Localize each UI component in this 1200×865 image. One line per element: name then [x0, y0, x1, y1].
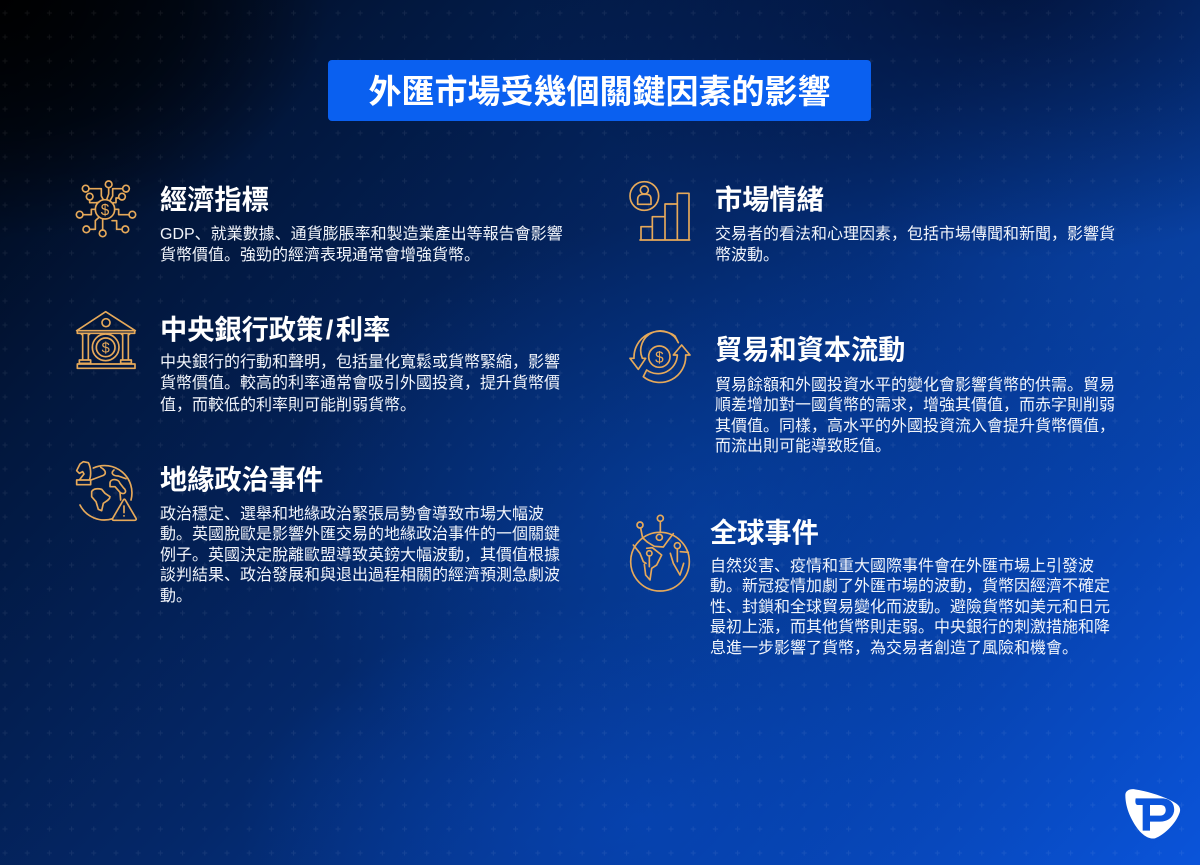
text: geopolitical events: 例子。英國決定脫離歐盟導致英鎊大幅波動，其價值根據 — [160, 547, 560, 564]
text: trade and capital flows: 而流出則可能導致貶值。 — [715, 438, 891, 455]
heading: trade and capital flows: 貿易和資本流動 — [715, 334, 905, 365]
icon: central bank: $ — [102, 341, 110, 357]
text: market sentiment — [715, 225, 1115, 264]
text: trade and capital flows: 順差增加對一國貨幣的需求，增強其價值，而赤字則削弱 — [715, 397, 1115, 414]
heading: economic indicators: 經濟指標 — [160, 184, 269, 215]
text: geopolitical events: 談判結果、政治發展和與退出過程相關的經濟預測急劇波 — [160, 567, 560, 584]
text: global events: 息進一步影響了貨幣，為交易者創造了風險和機會。 — [710, 640, 1078, 657]
text: economic indicators: 貨幣價值。強勁的經濟表現通常會增強貨幣。 — [160, 247, 480, 264]
text: geopolitical events — [160, 505, 560, 605]
text: market sentiment: 幣波動。 — [715, 247, 779, 264]
text: global events: 最初上漲，而其他貨幣則走弱。中央銀行的刺激措施和降 — [710, 619, 1110, 636]
icon: economic indicators network: $ — [101, 202, 110, 219]
text: trade and capital flows: 其價值。同樣，高水平的外國投資流入會提升貨幣價值， — [715, 418, 1115, 435]
title — [328, 60, 871, 121]
heading: central bank policy: 中央銀行政策/利率 — [160, 314, 390, 345]
text: central bank policy: 中央銀行的行動和聲明，包括量化寬鬆或貨幣緊縮，影響 — [160, 354, 560, 371]
text: global events: 自然災害、疫情和重大國際事件會在外匯市場上引發波 — [710, 558, 1094, 575]
text: global events: 性、封鎖和全球貿易變化而波動。避險貨幣如美元和日元 — [710, 599, 1110, 616]
text: geopolitical events: 政治穩定、選舉和地緣政治緊張局勢會導致市場大幅波 — [160, 506, 544, 523]
text: geopolitical events: 動。 — [160, 588, 192, 605]
text: trade and capital flows: 貿易餘額和外國投資水平的變化會影響貨幣的供需。貿易 — [715, 377, 1115, 394]
text: geopolitical events: 動。英國脫歐是影響外匯交易的地緣政治事件的一個關鍵 — [160, 526, 560, 543]
text: economic indicators: GDP、就業數據、通貨膨脹率和製造業產出等報告會影響 — [160, 226, 563, 243]
heading: geopolitical events: 地緣政治事件 — [160, 464, 323, 495]
title: 外匯市場受幾個關鍵因素的影響 — [368, 73, 830, 110]
text: central bank policy: 值，而較低的利率則可能削弱貨幣。 — [160, 397, 416, 414]
icon: trade and capital flow cycle: $ — [655, 349, 664, 366]
text: central bank policy: 貨幣價值。較高的利率通常會吸引外國投資，提升貨幣價 — [160, 375, 560, 392]
text: global events: 動。新冠疫情加劇了外匯市場的波動，貨幣因經濟不確定 — [710, 578, 1110, 595]
text: trade and capital flows — [715, 376, 1115, 455]
text: economic indicators — [160, 225, 563, 264]
text: market sentiment: 交易者的看法和心理因素，包括市場傳聞和新聞，影響貨 — [715, 226, 1115, 243]
text: global events — [710, 557, 1110, 657]
heading: market sentiment: 市場情緒 — [715, 184, 824, 215]
text: central bank policy — [160, 353, 560, 414]
heading: global events: 全球事件 — [710, 517, 819, 548]
